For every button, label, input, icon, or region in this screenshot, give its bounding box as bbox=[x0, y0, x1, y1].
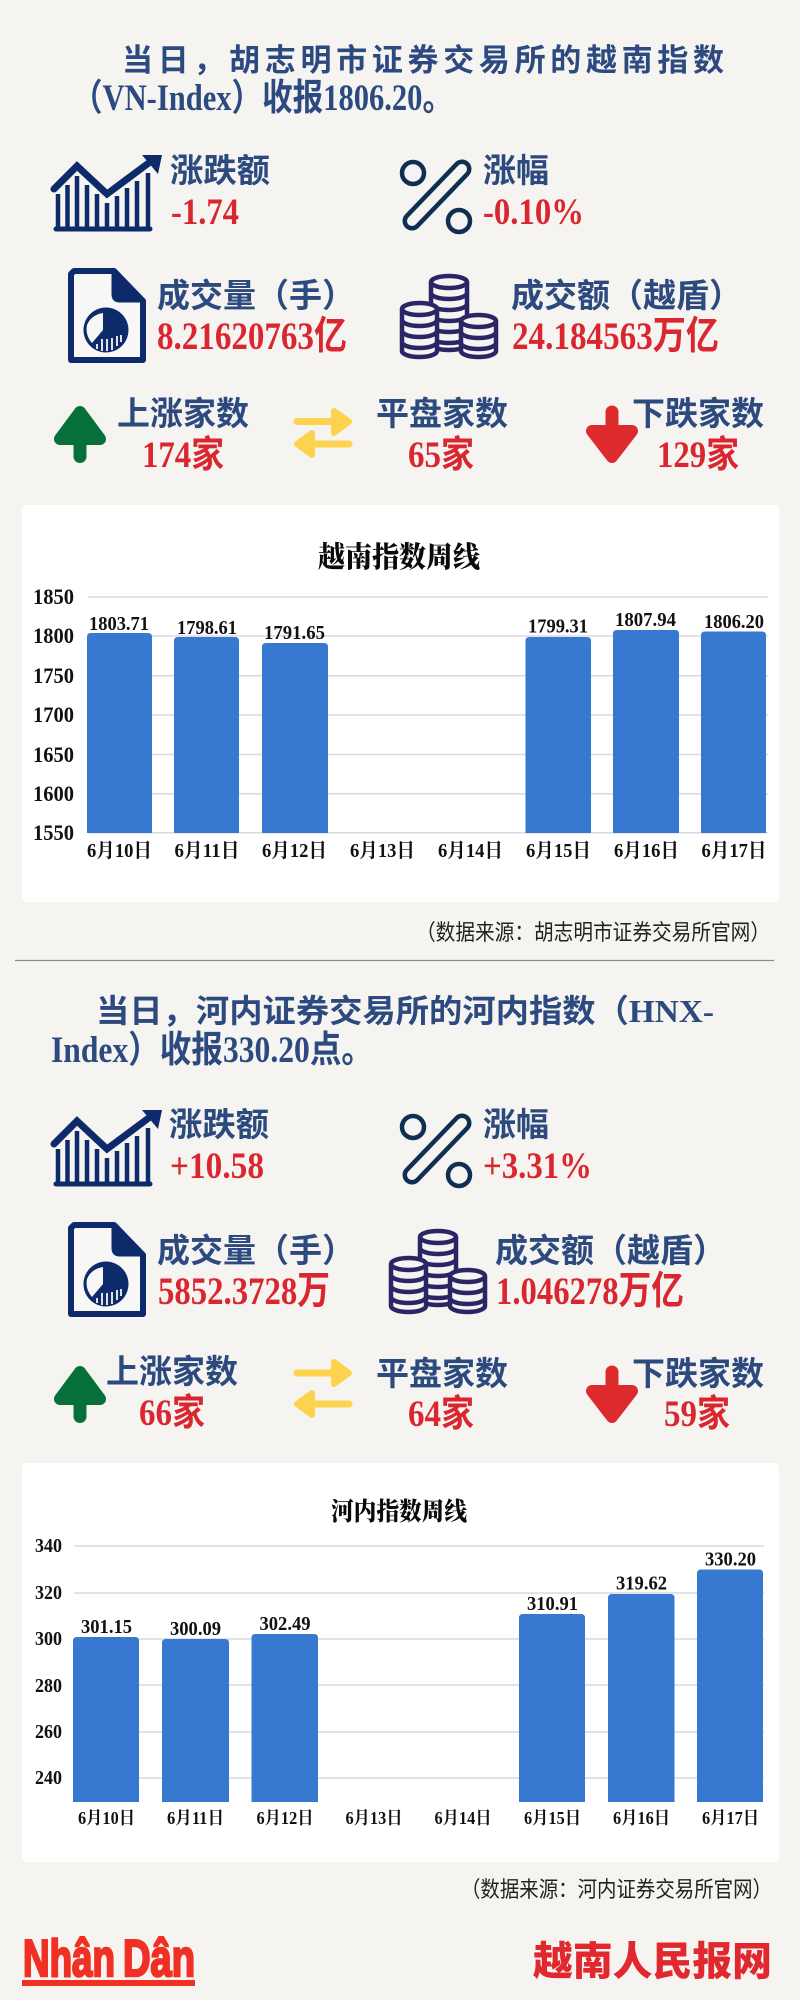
y axis labels: 340 bbox=[35, 1535, 62, 1557]
value labels: 319.62 bbox=[616, 1572, 667, 1594]
value labels: 300.09 bbox=[170, 1618, 221, 1640]
icon: unchanged arrows bbox=[297, 411, 349, 455]
stat: advancers: 174家 bbox=[142, 434, 224, 476]
stat: decliners: 129家 bbox=[657, 434, 739, 476]
stat: change amount: 涨跌额 bbox=[169, 1106, 269, 1143]
stat: decliners bbox=[632, 1355, 764, 1435]
value labels: 1799.31 bbox=[528, 616, 588, 638]
value labels: 301.15 bbox=[81, 1616, 132, 1638]
stat: unchanged bbox=[376, 1355, 508, 1435]
stat: change percent: 涨幅 bbox=[483, 152, 549, 189]
stat: unchanged: 65家 bbox=[408, 434, 474, 476]
bars bbox=[87, 630, 766, 833]
stat: unchanged: 平盘家数 bbox=[376, 395, 508, 432]
stat: trading value: 24.184563万亿 bbox=[512, 315, 719, 358]
heading: HNX-Index close: 当日，河内证券交易所的河内指数（HNX- bbox=[96, 993, 714, 1029]
section: VN-Index summary bbox=[54, 43, 764, 476]
heading: VN-Index close: 当日，胡志明市证券交易所的越南指数 bbox=[122, 43, 724, 78]
y axis labels: 1800 bbox=[33, 623, 74, 648]
y axis labels: 260 bbox=[35, 1721, 62, 1743]
x axis labels: 6月11日 bbox=[174, 839, 240, 862]
value labels: 1807.94 bbox=[615, 609, 676, 631]
stat: trading volume: 5852.3728万 bbox=[158, 1270, 330, 1313]
y axis labels: 1600 bbox=[33, 781, 74, 806]
x axis labels: 6月12日 bbox=[256, 1808, 314, 1828]
icon: percent bbox=[402, 162, 470, 232]
x axis labels: 6月12日 bbox=[262, 839, 327, 862]
value labels bbox=[81, 1548, 756, 1640]
heading: HNX-Index close bbox=[51, 993, 714, 1071]
stat: advancers bbox=[106, 1353, 238, 1434]
icon: up arrow bbox=[60, 1372, 100, 1416]
x axis labels: 6月14日 bbox=[434, 1808, 492, 1828]
stat: trading volume: 成交量（手） bbox=[157, 1232, 355, 1269]
panel: VN-Index weekly bar chart bbox=[22, 505, 779, 902]
section: HNX-Index summary bbox=[51, 993, 764, 1435]
y axis labels: 320 bbox=[35, 1582, 62, 1604]
value labels: 310.91 bbox=[527, 1593, 578, 1615]
value labels: 330.20 bbox=[705, 1548, 756, 1570]
stat: change percent: 涨幅 bbox=[483, 1106, 549, 1143]
icon: coin stacks bbox=[402, 276, 496, 357]
stat: unchanged bbox=[376, 395, 508, 476]
stat: trading value bbox=[495, 1232, 726, 1313]
stat: unchanged: 64家 bbox=[408, 1393, 474, 1435]
icon: up arrow bbox=[60, 412, 100, 456]
value labels: 1803.71 bbox=[89, 613, 149, 635]
stat: change amount bbox=[169, 1106, 269, 1187]
x axis labels: 6月16日 bbox=[613, 1808, 670, 1828]
brand name: 越南人民报网 bbox=[533, 1940, 772, 1984]
stat: unchanged: 平盘家数 bbox=[376, 1355, 508, 1392]
stat: change percent bbox=[483, 1106, 592, 1187]
stat: trading volume: 成交量（手） bbox=[157, 277, 355, 314]
value labels bbox=[89, 609, 764, 644]
icon: volume document bbox=[71, 271, 143, 360]
icon: volume document bbox=[71, 1225, 143, 1314]
x axis labels bbox=[87, 839, 766, 862]
icon: rising chart bbox=[54, 155, 162, 229]
x axis labels: 6月16日 bbox=[614, 839, 679, 862]
y axis labels: 1700 bbox=[33, 702, 74, 727]
y axis labels: 1650 bbox=[33, 742, 74, 767]
stat: change amount: 涨跌额 bbox=[170, 152, 270, 189]
y axis labels: 240 bbox=[35, 1767, 62, 1789]
heading: HNX-Index close: Index）收报330.20点。 bbox=[51, 1029, 373, 1071]
x axis labels: 6月10日 bbox=[78, 1808, 135, 1828]
bars bbox=[73, 1570, 763, 1802]
stat: trading value: 成交额（越盾） bbox=[495, 1232, 726, 1269]
y axis labels: 1750 bbox=[33, 663, 74, 688]
value labels: 1791.65 bbox=[264, 622, 325, 644]
stat: change percent: +3.31% bbox=[483, 1146, 592, 1187]
y axis labels bbox=[35, 1535, 62, 1789]
x axis labels: 6月15日 bbox=[524, 1808, 581, 1828]
x axis labels: 6月15日 bbox=[526, 839, 591, 862]
icon: percent bbox=[402, 1116, 470, 1186]
stat: change percent bbox=[483, 152, 584, 233]
stat: decliners: 下跌家数 bbox=[632, 1355, 764, 1392]
y axis labels: 280 bbox=[35, 1675, 62, 1697]
x axis labels: 6月17日 bbox=[702, 839, 766, 862]
logo: Nhan Dan: Nhân bbox=[23, 1930, 115, 1988]
stat: advancers: 上涨家数 bbox=[106, 1353, 238, 1390]
stat: trading volume bbox=[157, 1232, 355, 1313]
x axis labels bbox=[78, 1808, 759, 1828]
stat: advancers bbox=[117, 395, 249, 476]
stat: trading volume: 8.21620763亿 bbox=[157, 315, 347, 358]
stat: decliners: 59家 bbox=[664, 1393, 730, 1435]
stat: decliners bbox=[632, 395, 764, 476]
icon: unchanged arrows bbox=[297, 1362, 349, 1415]
x axis labels: 6月11日 bbox=[167, 1808, 224, 1828]
stat: trading volume bbox=[157, 277, 355, 358]
x axis labels: 6月17日 bbox=[702, 1808, 759, 1828]
chart title: 河内指数周线 bbox=[331, 1497, 467, 1526]
stat: change amount bbox=[170, 152, 270, 233]
stat: trading value: 成交额（越盾） bbox=[511, 277, 742, 314]
x axis labels: 6月13日 bbox=[346, 1808, 402, 1828]
stat: change amount: -1.74 bbox=[171, 192, 239, 233]
icon: down arrow bbox=[592, 412, 632, 457]
y axis labels: 1850 bbox=[33, 584, 74, 609]
value labels: 1798.61 bbox=[177, 617, 237, 639]
value labels: 302.49 bbox=[260, 1613, 310, 1635]
stat: trading value bbox=[511, 277, 742, 358]
x axis labels: 6月14日 bbox=[438, 839, 503, 862]
stat: advancers: 上涨家数 bbox=[117, 395, 249, 432]
y axis labels bbox=[33, 584, 74, 845]
logo: Nhan Dan: Dân bbox=[123, 1930, 195, 1988]
heading: VN-Index close: （VN-Index）收报1806.20。 bbox=[72, 77, 453, 119]
x axis labels: 6月10日 bbox=[87, 839, 152, 862]
value labels: 1806.20 bbox=[704, 611, 764, 633]
icon: rising chart bbox=[54, 1110, 162, 1184]
icon: down arrow bbox=[592, 1372, 632, 1417]
stat: change percent: -0.10% bbox=[483, 192, 584, 233]
y axis labels: 300 bbox=[35, 1628, 62, 1650]
stat: advancers: 66家 bbox=[139, 1392, 205, 1434]
chart title: 越南指数周线 bbox=[318, 540, 480, 574]
icon: coin stacks bbox=[391, 1231, 485, 1312]
x axis labels: 6月13日 bbox=[350, 839, 415, 862]
panel: HNX-Index weekly bar chart bbox=[22, 1463, 779, 1862]
stat: trading value: 1.046278万亿 bbox=[496, 1270, 684, 1313]
stat: change amount: +10.58 bbox=[170, 1146, 264, 1187]
heading: VN-Index close bbox=[72, 43, 724, 119]
stat: decliners: 下跌家数 bbox=[632, 395, 764, 432]
y axis labels: 1550 bbox=[33, 820, 74, 845]
